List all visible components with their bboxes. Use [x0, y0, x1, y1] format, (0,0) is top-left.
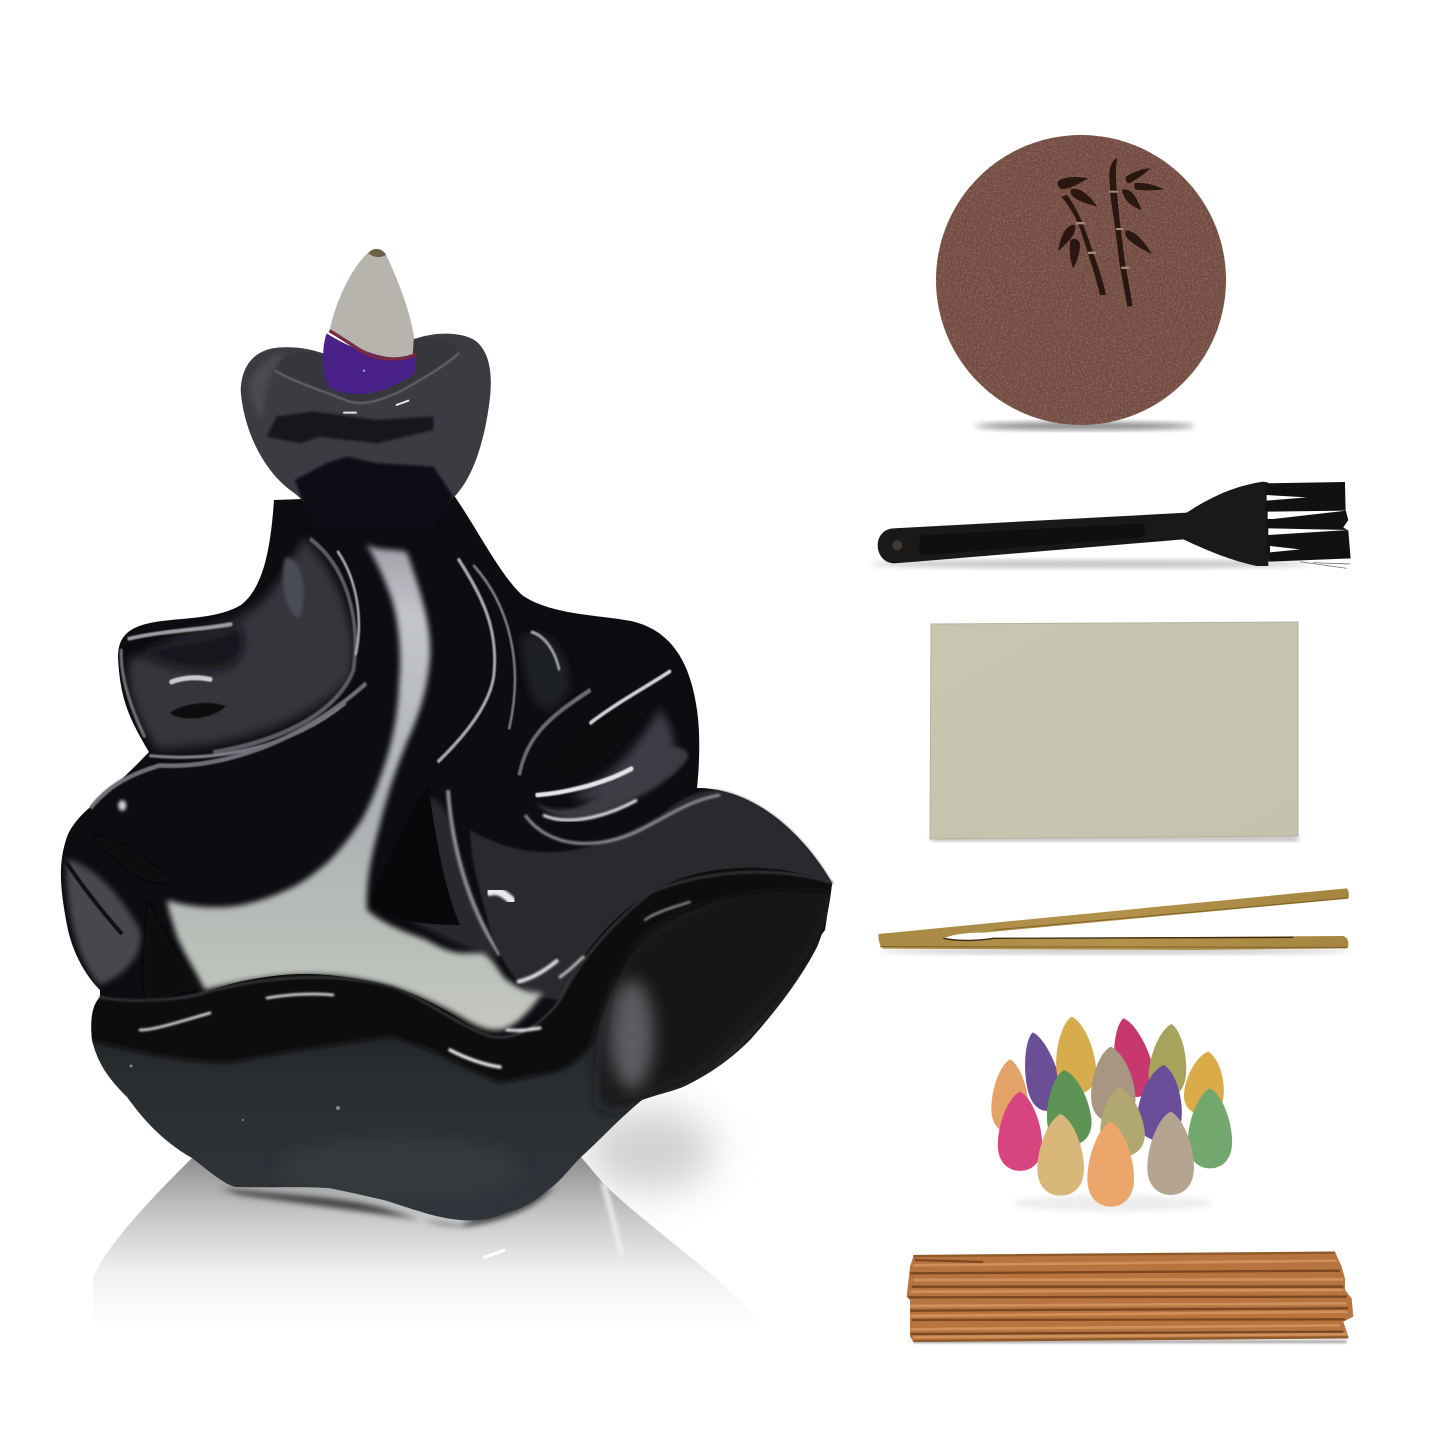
rim highlights [100, 872, 832, 1067]
burner body silhouette [61, 494, 832, 1090]
burner glossy folds [91, 539, 689, 819]
stone shadow [932, 836, 1298, 841]
bamboo tongs [878, 888, 1349, 950]
specks [130, 1064, 132, 1068]
burner cup [241, 249, 491, 530]
white smoke mist [167, 544, 543, 1030]
incense burner [61, 249, 850, 1230]
bowl left wall [66, 786, 500, 1002]
right wing shading [600, 878, 840, 1110]
felt coaster [936, 135, 1226, 425]
bristles [1265, 482, 1351, 568]
incense sticks bundle [907, 1252, 1353, 1343]
colourful incense cones [991, 1014, 1232, 1212]
right bowl inner [470, 790, 832, 1000]
sheen [610, 980, 654, 1090]
front bowl [80, 860, 850, 1230]
cleaning brush [878, 482, 1351, 568]
coaster shadow [975, 422, 1195, 430]
icon: bamboo cutout [1058, 158, 1164, 307]
incense cone [323, 249, 417, 394]
shadow tongs [880, 948, 1350, 954]
floor reflection [93, 1108, 770, 1335]
rim band [85, 864, 840, 1083]
ceramic stone pad [930, 622, 1298, 839]
brush shadow [870, 560, 1310, 568]
product kit illustration [60, 135, 1354, 1344]
